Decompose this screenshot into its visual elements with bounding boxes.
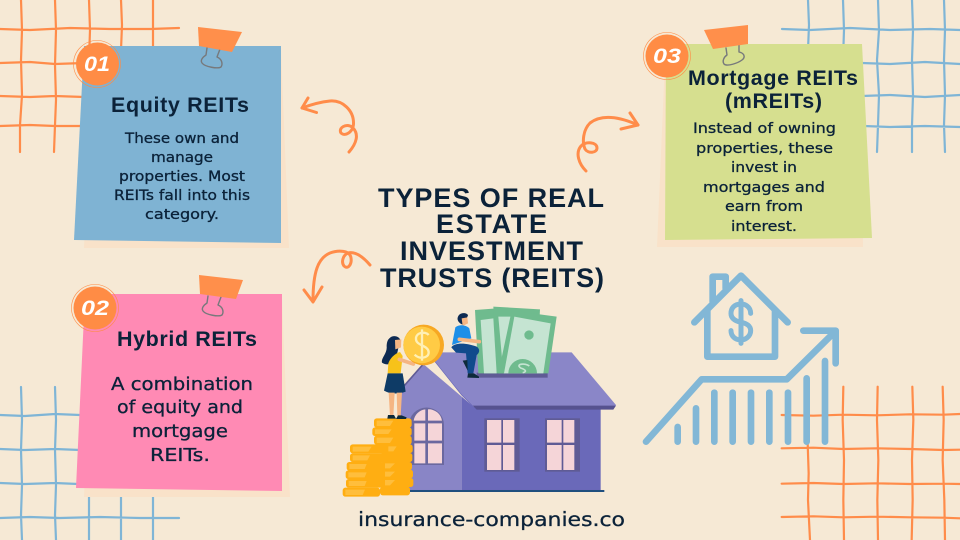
text block: hybrid description: A combination xyxy=(111,375,253,395)
badge: 01 xyxy=(74,40,120,88)
text block: mortgage description: interest. xyxy=(731,219,797,235)
text block: hybrid description: of equity and xyxy=(117,398,243,418)
title: ESTATE xyxy=(436,209,547,239)
panel: hybrid REITs note xyxy=(72,275,290,497)
text block: equity description xyxy=(114,131,250,223)
icon: paper clip xyxy=(704,25,748,65)
badge: 03: 03 xyxy=(653,45,681,68)
arrow: towards hybrid note xyxy=(304,251,370,302)
badge: 03 xyxy=(644,32,690,80)
man xyxy=(451,313,479,378)
heading: Equity REITs: Equity REITs xyxy=(111,93,249,117)
icon: paper clip xyxy=(199,275,243,316)
banknotes xyxy=(475,307,557,373)
title xyxy=(378,183,604,293)
badge: 01: 01 xyxy=(84,53,110,76)
text block: hybrid description: mortgage xyxy=(132,422,228,442)
badge: 02: 02 xyxy=(81,297,109,320)
badge: 02 xyxy=(72,284,118,332)
title: INVESTMENT xyxy=(400,236,584,266)
title: TRUSTS (REITS) xyxy=(380,263,604,293)
text block: mortgage description: invest in xyxy=(731,160,797,176)
text block: equity description: REITs fall into this xyxy=(114,188,250,204)
text block: mortgage description xyxy=(693,121,836,235)
illustration: house, money, people and coins xyxy=(343,307,616,497)
text block: hybrid description xyxy=(111,375,253,466)
text block: equity description: category. xyxy=(145,207,219,223)
text block: mortgage description: properties, these xyxy=(696,141,833,157)
text block: equity description: properties. Most xyxy=(119,169,246,185)
heading: Mortgage REITs (mREITs): Mortgage REITs xyxy=(688,66,858,90)
heading: Mortgage REITs (mREITs): (mREITs) xyxy=(725,89,822,113)
heading: Hybrid REITs: Hybrid REITs xyxy=(117,327,257,351)
gold dollar coin xyxy=(403,325,444,365)
arrow: towards equity note xyxy=(302,98,356,152)
text block: equity description: These own and xyxy=(124,131,239,147)
panel: equity REITs note xyxy=(74,27,289,248)
icon: paper clip xyxy=(198,27,242,68)
arrow: towards mortgage note xyxy=(578,113,638,171)
house xyxy=(398,352,616,492)
text block: mortgage description: Instead of owning xyxy=(693,121,836,137)
heading: Mortgage REITs (mREITs) xyxy=(688,66,858,113)
panel: mortgage REITs note xyxy=(644,25,872,247)
text block: equity description: manage xyxy=(151,150,213,166)
text block: mortgage description: earn from xyxy=(725,199,803,215)
text block: mortgage description: mortgages and xyxy=(703,180,825,196)
woman xyxy=(382,336,413,419)
text block: hybrid description: REITs. xyxy=(150,446,210,466)
coin stacks xyxy=(343,418,413,497)
line chart icon: house and rising arrow xyxy=(646,276,960,540)
footer website text: insurance-companies.co xyxy=(358,508,625,531)
title: TYPES OF REAL xyxy=(378,183,604,213)
